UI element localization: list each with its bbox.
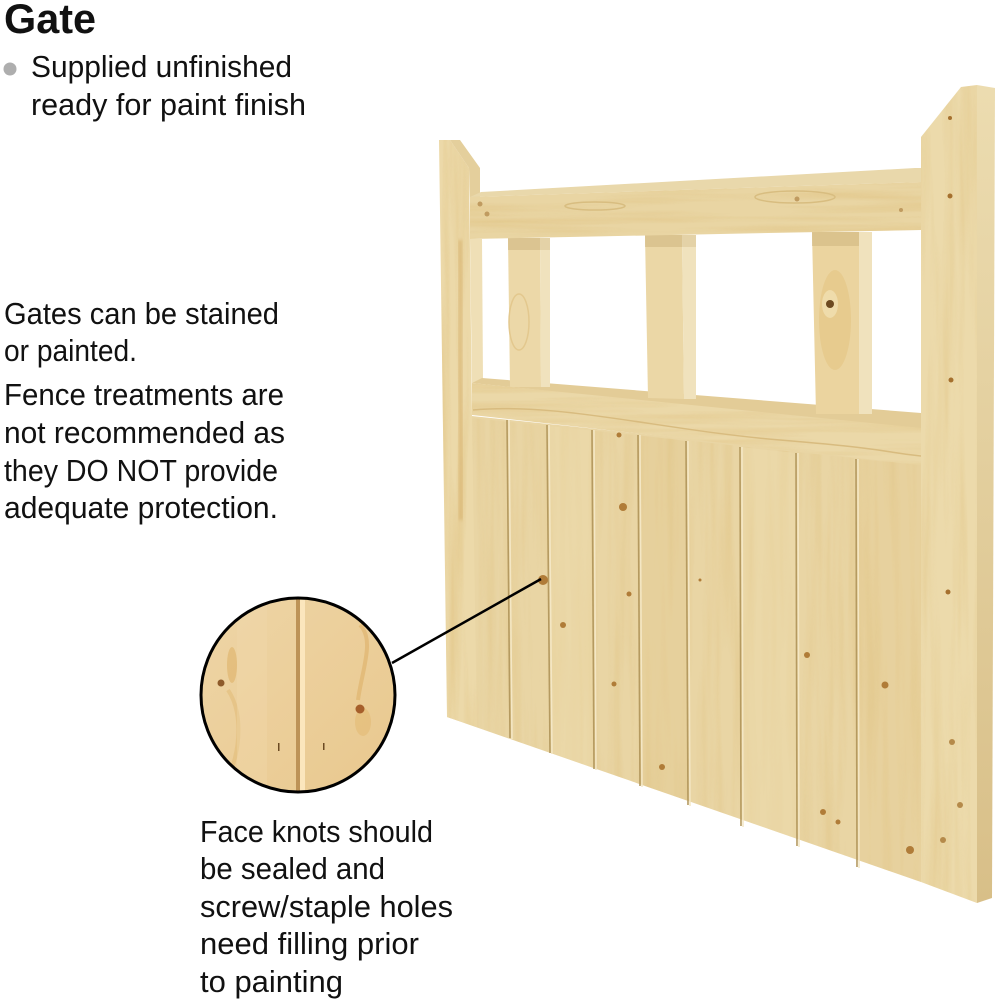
right post front face	[921, 85, 977, 903]
knot left	[218, 680, 224, 686]
lower rail grain	[472, 380, 921, 470]
text block: staining advice: or painted.	[4, 333, 137, 368]
stile 1	[508, 238, 550, 387]
callout leader line	[392, 579, 541, 663]
magnified wood detail	[222, 597, 371, 798]
stile 3	[812, 232, 872, 414]
bullet note: supplied unfinished	[4, 49, 306, 122]
text block: knot advice: be sealed and	[200, 851, 385, 886]
right post side	[977, 85, 995, 903]
stile 2	[645, 235, 696, 399]
top rail grain	[470, 190, 921, 232]
text block: staining advice: adequate protection.	[4, 490, 278, 525]
illustration: wooden gate	[439, 85, 995, 905]
text block: knot advice: Face knots should	[200, 814, 433, 849]
knot right	[356, 704, 364, 714]
text block: knot advice: to painting	[200, 964, 343, 999]
left post front face	[439, 140, 477, 727]
text block: staining advice: Fence treatments are	[4, 377, 284, 412]
text block: staining advice	[4, 296, 285, 525]
board grooves	[507, 420, 857, 867]
text block: staining advice: they DO NOT provide	[4, 453, 278, 488]
right post grain	[921, 85, 979, 905]
lower rail front face	[472, 383, 921, 465]
magnified wood fill	[201, 598, 395, 792]
left post back side	[450, 140, 480, 200]
text block: knot advice: screw/staple holes	[200, 889, 453, 924]
board panel	[447, 416, 921, 882]
bullet icon	[4, 62, 16, 76]
top rail top face	[470, 168, 921, 197]
bullet text	[31, 49, 306, 122]
bullet text: Supplied unfinished	[31, 49, 292, 84]
board panel grain	[447, 410, 921, 890]
text block: staining advice: Gates can be stained	[4, 296, 279, 331]
bullet text: ready for paint finish	[31, 87, 306, 122]
left post grain	[442, 140, 474, 726]
back edge of left post opening	[470, 239, 483, 383]
lower rail top face	[472, 378, 921, 430]
top rail front face	[470, 182, 921, 239]
text block: staining advice: not recommended as	[4, 415, 285, 450]
callout: magnified face knots	[201, 597, 395, 798]
board highlights	[509, 420, 859, 868]
circle outline	[201, 598, 395, 792]
text block: knot advice: need filling prior	[200, 926, 419, 961]
text block: knot advice	[200, 814, 453, 999]
board knots	[538, 432, 914, 854]
